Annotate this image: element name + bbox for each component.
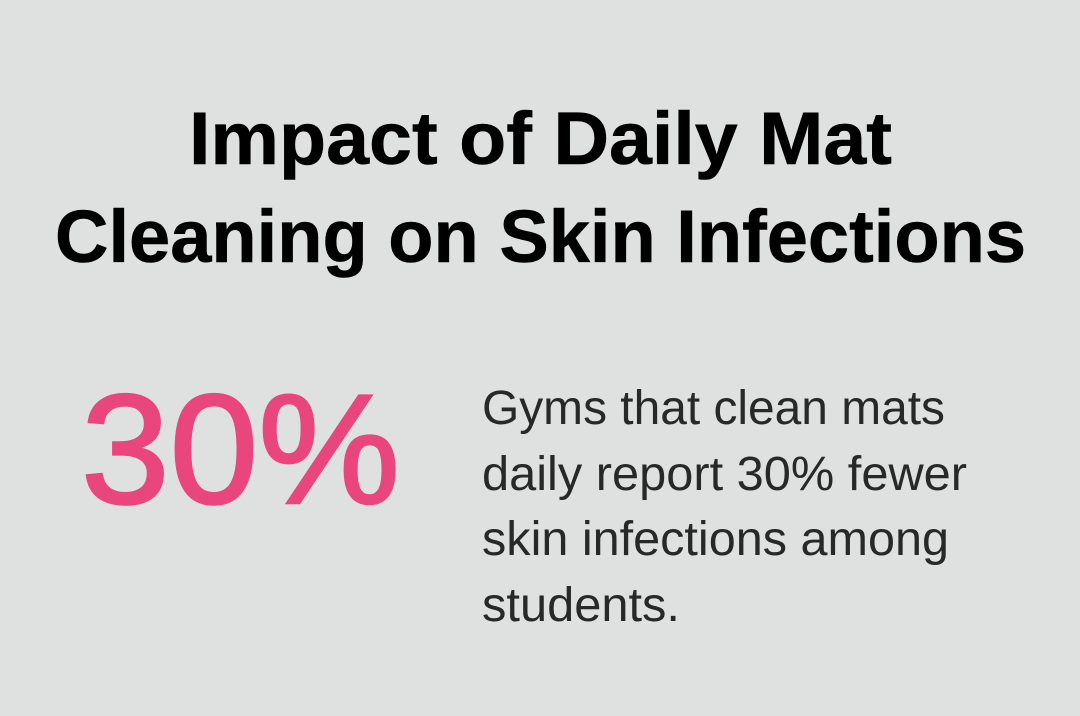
title [55,97,1026,278]
description text block: students. [482,579,680,632]
big statistic: 30%: 30% [81,363,400,537]
title: Impact of Daily Mat [189,97,892,180]
description text block: Gyms that clean mats [482,382,945,435]
description text block [482,382,967,632]
description text block: daily report 30% fewer [482,448,967,501]
title: Cleaning on Skin Infections [55,195,1026,278]
description text block: skin infections among [482,513,949,566]
